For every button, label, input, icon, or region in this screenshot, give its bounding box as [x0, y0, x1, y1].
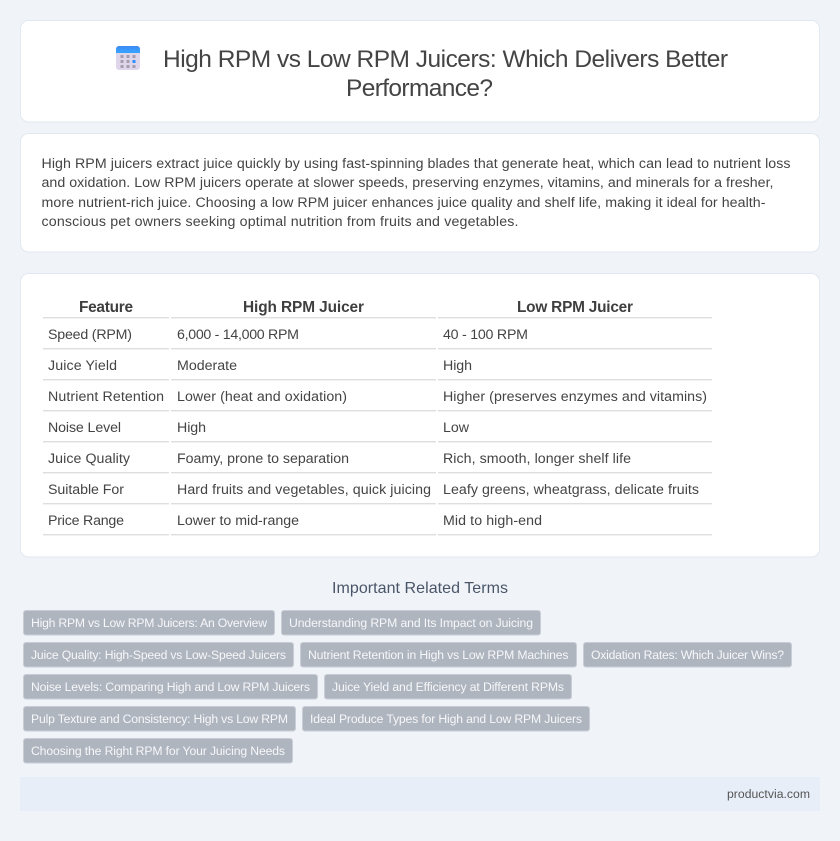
table row: juice quality: Foamy, prone to separation: [177, 451, 349, 467]
title: Performance?: [346, 75, 493, 102]
text block: introduction paragraph: and oxidation. Low RPM juicers operate at slower speeds, preserving enzymes, vitamins, and minerals for a fresher,: [42, 175, 774, 191]
panel: introduction: [20, 134, 820, 252]
tag: Juice Quality: High-Speed vs Low-Speed Juicers: [31, 648, 286, 662]
tag: [302, 706, 590, 731]
table row: speed: 6,000 - 14,000 RPM: [177, 327, 299, 343]
tag: High RPM vs Low RPM Juicers: An Overview: [31, 616, 267, 630]
table row: price range: Lower to mid-range: [177, 513, 299, 529]
tag: [324, 674, 572, 699]
tag: [24, 674, 318, 699]
text block: introduction paragraph: High RPM juicers extract juice quickly by using fast-spinning blades that generate heat, which can lead to nutrient loss: [42, 156, 790, 172]
panel: title header: [20, 20, 820, 122]
tag: Understanding RPM and Its Impact on Juicing: [289, 616, 533, 630]
tag: Pulp Texture and Consistency: High vs Low RPM: [31, 712, 288, 726]
tag: [24, 706, 296, 731]
table header row: Feature: [79, 299, 133, 316]
table row: juice quality: Juice Quality: [48, 451, 131, 467]
title: [163, 46, 728, 102]
tag: Noise Levels: Comparing High and Low RPM Juicers: [31, 680, 310, 694]
table row: juice yield: [43, 358, 712, 380]
table row: price range: Price Range: [48, 513, 124, 529]
footer: [20, 777, 820, 811]
table row: juice quality: Rich, smooth, longer shelf life: [443, 451, 631, 467]
table row: noise level: Noise Level: [48, 420, 121, 436]
table row: speed: 40 - 100 RPM: [443, 327, 528, 343]
panel: comparison table: [20, 274, 820, 557]
table header row: Low RPM Juicer: [517, 299, 633, 316]
table row: nutrient retention: Higher (preserves enzymes and vitamins): [443, 389, 707, 405]
table row: noise level: High: [177, 420, 206, 436]
tag: Nutrient Retention in High vs Low RPM Machines: [308, 648, 568, 662]
tag: Ideal Produce Types for High and Low RPM Juicers: [310, 712, 582, 726]
heading: important related terms: Important Related Terms: [332, 580, 508, 597]
title: High RPM vs Low RPM Juicers: Which Delivers Better: [163, 46, 728, 73]
table row: suitable for: [43, 482, 712, 504]
text block: introduction paragraph: conscious pet owners seeking optimal nutrition from fruits and vegetables.: [42, 214, 518, 230]
tag: [584, 642, 792, 667]
table row: nutrient retention: Nutrient Retention: [48, 389, 164, 405]
table header row: High RPM Juicer: [243, 299, 364, 316]
table row: juice yield: Moderate: [177, 358, 237, 374]
footer: productvia.com: [727, 787, 810, 801]
table row: speed: Speed (RPM): [48, 327, 132, 343]
table row: juice quality: [43, 451, 712, 473]
tag: [300, 642, 576, 667]
tag: Oxidation Rates: Which Juicer Wins?: [591, 648, 784, 662]
tag: [24, 642, 294, 667]
table header row: [43, 299, 712, 318]
panel: related term tags: [24, 610, 792, 763]
tag: Choosing the Right RPM for Your Juicing Needs: [31, 744, 285, 758]
table row: noise level: Low: [443, 420, 470, 436]
table row: suitable for: Hard fruits and vegetables, quick juicing: [177, 482, 431, 498]
table row: price range: Mid to high-end: [443, 513, 542, 529]
table row: nutrient retention: [43, 389, 712, 411]
text block: introduction paragraph: [42, 156, 790, 230]
tag: [24, 610, 274, 635]
text block: introduction paragraph: more nutrient-rich juice. Choosing a low RPM juicer enhances juice quality and shelf life, making it ideal for health-: [42, 195, 766, 211]
table row: suitable for: Leafy greens, wheatgrass, delicate fruits: [443, 482, 699, 498]
tag: Juice Yield and Efficiency at Different RPMs: [332, 680, 564, 694]
table row: juice yield: High: [443, 358, 472, 374]
tag: [282, 610, 540, 635]
table row: noise level: [43, 420, 712, 442]
table row: speed: [43, 327, 712, 349]
table row: suitable for: Suitable For: [48, 482, 124, 498]
tag: [24, 738, 292, 763]
table row: juice yield: Juice Yield: [48, 358, 117, 374]
table row: price range: [43, 513, 712, 535]
icon: calendar: [116, 46, 140, 70]
table row: nutrient retention: Lower (heat and oxidation): [177, 389, 347, 405]
